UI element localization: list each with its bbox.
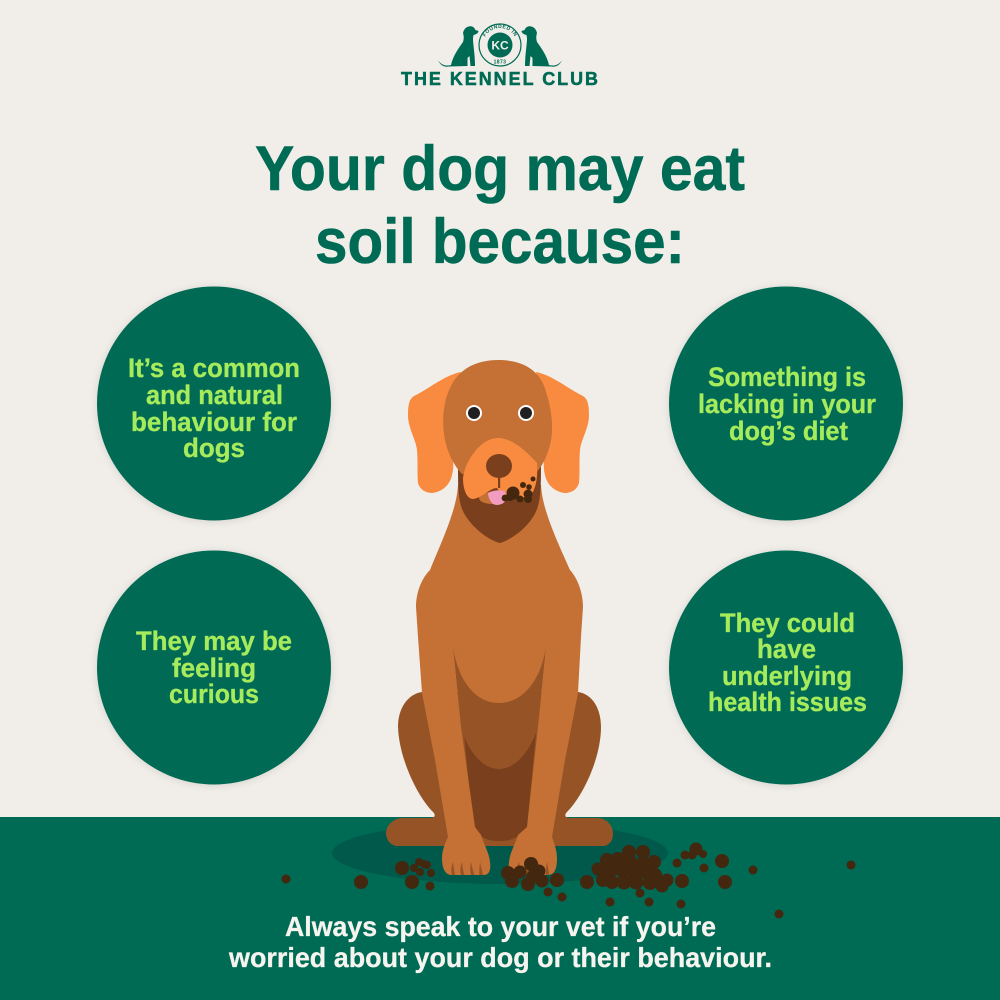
panel: common and natural behaviour: behaviour for [131, 407, 297, 437]
panel: underlying health issues: underlying [722, 661, 852, 691]
panel: underlying health issues: health issues [708, 687, 867, 717]
eyes [466, 405, 534, 421]
panel: common and natural behaviour: dogs [183, 433, 245, 463]
nose [486, 454, 512, 488]
panel: common and natural behaviour [97, 286, 331, 520]
panel: feeling curious [97, 550, 331, 784]
dog illustration [386, 360, 613, 875]
panel: lacking in diet [669, 286, 903, 520]
toe lines [451, 862, 549, 875]
neck, chest and front legs [416, 485, 583, 875]
vet advice text [228, 911, 772, 973]
panel: feeling curious: curious [169, 679, 259, 709]
soil scattered on ground [282, 842, 856, 918]
left ear [408, 372, 461, 493]
head [443, 360, 552, 474]
panel: lacking in diet: dog’s diet [729, 416, 848, 446]
panel: lacking in diet: Something is [708, 362, 866, 392]
panel: common and natural behaviour: It’s a common [128, 353, 300, 383]
ground shadow [332, 822, 668, 884]
logo roundel: 1873 [494, 60, 506, 66]
logo: The Kennel Club [400, 23, 600, 89]
vet advice text: worried about your dog or their behaviour. [228, 942, 772, 973]
logo dog right [522, 26, 562, 67]
muzzle [463, 438, 537, 499]
mid belly [452, 640, 547, 769]
soil pile [592, 845, 662, 890]
right ear [536, 372, 589, 493]
ground band [0, 817, 1000, 1000]
title: Your dog may eat [255, 134, 745, 204]
chest bib [458, 460, 541, 543]
vet advice text: Always speak to your vet if you’re [285, 911, 716, 942]
panel: lacking in diet: lacking in your [698, 389, 876, 419]
panel: underlying health issues [669, 550, 903, 784]
haunches and back feet [386, 692, 613, 846]
panel: underlying health issues: have [757, 634, 816, 664]
panel: underlying health issues: They could [720, 608, 855, 638]
panel: common and natural behaviour: and natural [146, 380, 283, 410]
belly tufts [474, 828, 526, 842]
logo dog left [438, 26, 478, 67]
tongue [488, 490, 506, 505]
logo wordmark: THE KENNEL CLUB [401, 69, 600, 89]
logo roundel [478, 23, 522, 67]
panel: feeling curious: They may be [136, 626, 292, 656]
logo roundel: KC [491, 38, 509, 52]
soil on muzzle [502, 476, 536, 503]
logo roundel: FOUNDED IN [482, 24, 518, 37]
lower belly [455, 640, 545, 841]
title [255, 134, 745, 277]
title: soil because: [315, 207, 685, 277]
mouth [479, 492, 505, 504]
panel: feeling curious: feeling [172, 653, 256, 683]
